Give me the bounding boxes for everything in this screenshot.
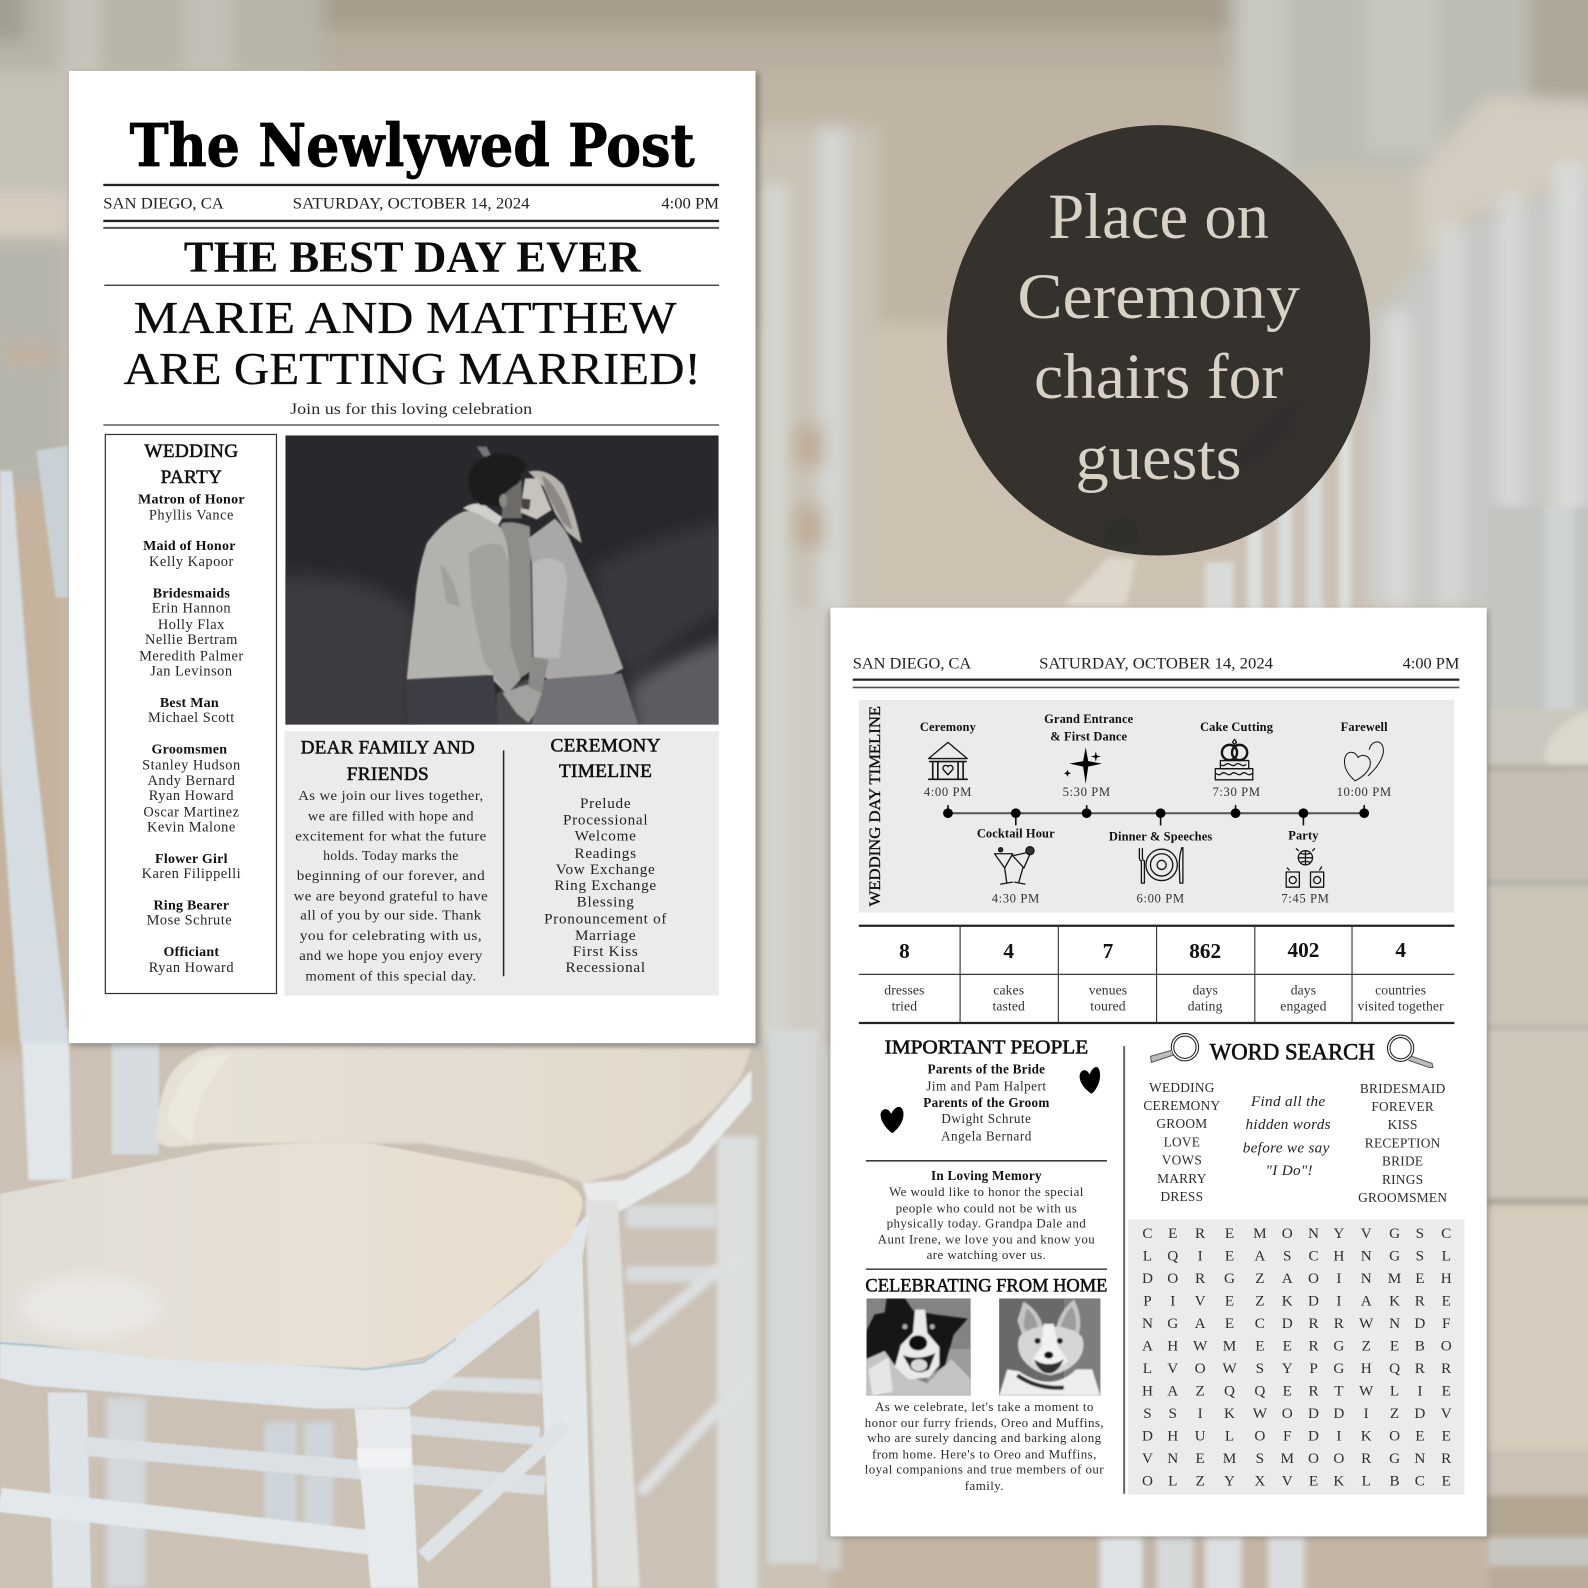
ceremony timeline list: Vow Exchange <box>556 861 656 878</box>
ceremony timeline list: Pronouncement of <box>544 911 667 928</box>
wedding party names: Best Man <box>160 696 219 711</box>
word list left: GROOM <box>1156 1116 1207 1131</box>
icon: martini glasses <box>995 847 1034 884</box>
callout: place on ceremony chairs: Ceremony <box>1017 261 1300 333</box>
stat: venues: 7 <box>1103 939 1114 963</box>
ceremony timeline list: Recessional <box>565 959 646 976</box>
event: grand entrance <box>1044 712 1134 799</box>
photo: corgi <box>999 1298 1100 1396</box>
wedding party names: Michael Scott <box>148 710 235 726</box>
word list right: RINGS <box>1382 1172 1423 1187</box>
word search grid: VNEMSMOORGNR <box>1142 1450 1452 1467</box>
word list right <box>1358 1081 1447 1205</box>
ceremony timeline list: First Kiss <box>573 943 639 960</box>
letter body: we are beyond grateful to have <box>294 889 488 904</box>
letter heading: DEAR FAMILY AND <box>301 737 475 758</box>
ceremony timeline list: Processional <box>563 811 648 828</box>
panel: important people: Parents of the Bride <box>928 1062 1045 1077</box>
wedding party heading <box>144 441 238 488</box>
panel: in loving memory: people who could not be with us <box>896 1200 1077 1215</box>
timeline vertical title: WEDDING DAY TIMELINE <box>867 706 884 906</box>
icon: heart right <box>1080 1067 1100 1094</box>
icon: two hearts <box>1344 742 1383 781</box>
stat: cakes: cakes <box>993 983 1024 998</box>
event: dinner and speeches: Dinner & Speeches <box>1109 830 1212 844</box>
letter body <box>294 789 488 984</box>
page shadow <box>828 610 1489 1538</box>
ceremony timeline heading <box>550 735 661 782</box>
panel: in loving memory: physically today. Grandpa Dale and <box>887 1215 1086 1230</box>
front seat rim <box>0 1211 590 1409</box>
top dateline <box>103 184 719 229</box>
icon: right magnifier <box>1387 1035 1433 1067</box>
word list right: RECEPTION <box>1365 1135 1441 1150</box>
word list left: LOVE <box>1164 1134 1200 1149</box>
front seat cushion <box>0 1142 583 1368</box>
callout: place on ceremony chairs: Place on <box>1048 181 1269 253</box>
wedding party names: Stanley Hudson <box>142 758 241 774</box>
back page dateline <box>853 655 1459 688</box>
panel: important people: Jim and Pam Halpert <box>926 1079 1047 1094</box>
stat: days dating: 862 <box>1189 939 1221 963</box>
letter heading: FRIENDS <box>347 764 429 785</box>
back seat <box>156 1046 751 1183</box>
event: farewell: Farewell <box>1341 720 1388 734</box>
panel: celebrating from home: CELEBRATING FROM HOME <box>865 1275 1107 1296</box>
word search grid: OLZYXVEKLBCE <box>1142 1473 1451 1490</box>
back chair posts <box>21 1030 72 1180</box>
word search instructions: before we say <box>1243 1140 1330 1157</box>
icon: sparkles <box>1064 747 1102 784</box>
far legs <box>768 1030 818 1564</box>
callout: place on ceremony chairs: guests <box>1076 422 1242 494</box>
sub headline: MARIE AND MATTHEW <box>134 292 677 343</box>
wedding party names: Ring Bearer <box>153 898 229 913</box>
stat: countries: visited together <box>1358 999 1444 1014</box>
event: cake cutting <box>1200 720 1274 799</box>
word search grid: HAZQQERTWLIE <box>1142 1383 1451 1400</box>
celebrating paragraph: loyal companions and true members of our <box>865 1462 1104 1477</box>
wedding party names: Maid of Honor <box>143 539 236 554</box>
celebrating paragraph: who are surely dancing and barking along <box>867 1430 1102 1445</box>
panel: word search <box>1128 1034 1464 1495</box>
letter body: moment of this special day. <box>305 969 477 984</box>
wedding party names: Bridesmaids <box>153 587 230 602</box>
sub headline <box>124 292 701 394</box>
event: cake cutting: 7:30 PM <box>1212 785 1261 799</box>
hands <box>503 683 542 723</box>
stat: venues: toured <box>1090 999 1126 1014</box>
wedding party names: Oscar Martinez <box>143 804 239 820</box>
event: dinner and speeches: 6:00 PM <box>1137 891 1185 905</box>
headline: THE BEST DAY EVER <box>184 231 641 281</box>
event: ceremony: Ceremony <box>920 720 977 734</box>
word list left: WEDDING <box>1149 1080 1215 1095</box>
panel: important people: Dwight Schrute <box>941 1111 1031 1126</box>
man jeans <box>406 675 498 725</box>
stat: dresses: dresses <box>884 983 924 998</box>
word list left: MARRY <box>1157 1171 1207 1186</box>
panel: in loving memory: are watching over us. <box>927 1247 1046 1262</box>
wedding party names: Meredith Palmer <box>139 648 244 664</box>
letter body: all of you by our side. Thank <box>300 909 482 924</box>
word search instructions: hidden words <box>1246 1116 1331 1133</box>
wedding party names: Matron of Honor <box>138 492 245 507</box>
event: party: 7:45 PM <box>1281 891 1330 905</box>
ceremony timeline list: Blessing <box>577 893 635 910</box>
wedding party names <box>138 492 245 976</box>
timeline axis <box>943 805 1369 825</box>
celebrating paragraph: As we celebrate, let's take a moment to <box>875 1399 1094 1414</box>
ceremony timeline list: Ring Exchange <box>554 877 657 894</box>
icon: heart left <box>881 1107 903 1133</box>
page: newspaper front page <box>69 71 756 1043</box>
stat: dresses <box>884 939 924 1014</box>
word search grid: CEREMONYVGSC <box>1142 1225 1451 1242</box>
word list right: BRIDE <box>1382 1154 1423 1169</box>
word search grid: LQIEASCHNGSL <box>1143 1248 1451 1265</box>
skin gap <box>501 522 533 678</box>
event: farewell <box>1337 720 1392 799</box>
stat: days engaged: days <box>1291 983 1316 998</box>
panel: celebrating from home <box>865 1275 1107 1493</box>
callout: place on ceremony chairs: chairs for <box>1034 341 1284 413</box>
left foreground post <box>0 471 69 1043</box>
back page dateline: 4:00 PM <box>1403 655 1459 672</box>
ceremony timeline list <box>544 795 667 976</box>
stat: cakes: tasted <box>992 999 1025 1014</box>
invitation line: Join us for this loving celebration <box>290 400 532 418</box>
word search grid: SSIKWODDIZDV <box>1143 1405 1452 1422</box>
panel: important people: Parents of the Groom <box>923 1095 1050 1110</box>
ceremony timeline heading: TIMELINE <box>559 761 652 782</box>
word search heading: WORD SEARCH <box>1210 1039 1375 1065</box>
back page dateline: SAN DIEGO, CA <box>853 655 972 672</box>
stat: dresses: tried <box>892 999 917 1014</box>
panel: in loving memory: We would like to honor the special <box>889 1184 1084 1199</box>
word list left: VOWS <box>1162 1153 1202 1168</box>
event: cocktail hour: Cocktail Hour <box>977 827 1055 841</box>
woman skirt <box>532 673 638 725</box>
wedding party names: Karen Filippelli <box>142 866 241 882</box>
wedding party names: Kelly Kapoor <box>149 554 234 570</box>
wedding party names: Holly Flax <box>158 617 225 633</box>
front chair legs and rails <box>48 1393 91 1588</box>
letter body: excitement for what the future <box>295 830 487 845</box>
celebrating paragraph: family. <box>965 1478 1004 1493</box>
ceremony timeline list: Readings <box>575 845 637 862</box>
word list left: CEREMONY <box>1143 1098 1220 1113</box>
stat: venues: venues <box>1089 983 1127 998</box>
callout: place on ceremony chairs <box>947 125 1370 555</box>
panel: in loving memory: In Loving Memory <box>931 1168 1042 1183</box>
stat: days dating <box>1188 939 1223 1014</box>
event: farewell: 10:00 PM <box>1337 785 1392 799</box>
page shadow <box>71 73 760 1046</box>
stat: days dating: days <box>1192 983 1218 998</box>
letter body: you for celebrating with us, <box>300 929 482 944</box>
panel: in loving memory: Aunt Irene, we love you and know you <box>878 1232 1095 1247</box>
letter body: As we join our lives together, <box>298 789 484 804</box>
stat: dresses: 8 <box>899 939 910 963</box>
icon: gazebo <box>929 742 967 779</box>
wedding party names: Officiant <box>163 945 219 960</box>
event: cocktail hour: 4:30 PM <box>992 891 1040 905</box>
event: cake cutting: Cake Cutting <box>1200 720 1274 734</box>
stat: cakes: 4 <box>1003 939 1014 963</box>
wedding party names: Erin Hannon <box>152 601 231 617</box>
stat: days engaged <box>1280 938 1327 1014</box>
word list right: GROOMSMEN <box>1358 1190 1447 1205</box>
word list right: KISS <box>1388 1117 1418 1132</box>
stat: days engaged: engaged <box>1280 999 1327 1014</box>
wedding party heading: WEDDING <box>144 441 238 462</box>
word search grid: LVOWSYPGHQRR <box>1143 1360 1452 1377</box>
event: ceremony <box>920 720 977 799</box>
stat: days dating: dating <box>1188 999 1223 1014</box>
event: party <box>1281 829 1330 905</box>
event: grand entrance: 5:30 PM <box>1063 785 1111 799</box>
celebrating paragraph <box>865 1399 1104 1493</box>
top dateline: SAN DIEGO, CA <box>103 196 225 213</box>
wedding party heading: PARTY <box>161 467 222 488</box>
wedding party names: Ryan Howard <box>149 960 234 976</box>
panel: important people: Angela Bernard <box>941 1128 1032 1143</box>
wedding party names: Mose Schrute <box>147 913 232 929</box>
stat: countries: 4 <box>1395 938 1406 962</box>
stat: countries: countries <box>1375 983 1426 998</box>
word list left: DRESS <box>1160 1189 1203 1204</box>
ceremony timeline list: Welcome <box>575 828 637 845</box>
word list right: FOREVER <box>1371 1099 1434 1114</box>
celebrating paragraph: honor our furry friends, Oreo and Muffins, <box>865 1415 1104 1430</box>
top dateline: 4:00 PM <box>661 196 719 213</box>
ceremony timeline heading: CEREMONY <box>550 735 661 756</box>
photo: border collie <box>866 1298 971 1396</box>
word search grid: DORGZAOINMEH <box>1142 1270 1452 1287</box>
word search grid: NGAECDRRWNDF <box>1142 1315 1450 1332</box>
page: newspaper back page <box>830 608 1487 1536</box>
stat: countries <box>1358 938 1444 1014</box>
panel: important people: IMPORTANT PEOPLE <box>885 1036 1088 1058</box>
word search grid <box>1128 1219 1464 1495</box>
stat: venues <box>1089 939 1127 1014</box>
event: ceremony: 4:00 PM <box>924 785 972 799</box>
masthead title: The Newlywed Post <box>130 111 695 180</box>
event: dinner and speeches <box>1109 830 1212 905</box>
letter body: and we hope you enjoy every <box>299 949 483 964</box>
wedding party names: Kevin Malone <box>147 819 236 835</box>
letter body: we are filled with hope and <box>308 809 474 824</box>
word list right: BRIDESMAID <box>1360 1081 1446 1096</box>
event: cocktail hour <box>977 827 1055 905</box>
panel: wedding party <box>105 434 276 994</box>
icon: cake with rings <box>1215 739 1253 780</box>
word search instructions: Find all the <box>1250 1093 1325 1110</box>
wedding party names: Andy Bernard <box>147 773 236 789</box>
celebrating paragraph: from home. Here's to Oreo and Muffins, <box>872 1446 1097 1461</box>
ceremony timeline list: Marriage <box>575 927 636 944</box>
word search instructions: "I Do"! <box>1266 1162 1313 1179</box>
icon: left magnifier <box>1150 1034 1199 1062</box>
panel: important people <box>881 1036 1100 1143</box>
word search instructions <box>1243 1093 1331 1179</box>
letter heading <box>301 737 475 785</box>
wedding party names: Groomsmen <box>152 742 227 757</box>
panel: in loving memory <box>878 1168 1095 1262</box>
word search grid: DHULOFDIKOEE <box>1142 1428 1451 1445</box>
word search grid: AHWMEERGZEBO <box>1142 1338 1452 1355</box>
event: grand entrance: Grand Entrance <box>1044 712 1134 726</box>
event: party: Party <box>1288 829 1319 843</box>
stat: cakes <box>992 939 1025 1014</box>
back seat rim <box>582 1069 751 1211</box>
back chair leg <box>585 1200 640 1588</box>
word list left <box>1143 1080 1220 1204</box>
panel: letter and ceremony timeline <box>285 731 719 996</box>
soft chairs near callout <box>1205 562 1234 613</box>
stat: days engaged: 402 <box>1287 938 1319 962</box>
woman hair and face <box>528 471 582 543</box>
icon: disco ball and speakers <box>1286 849 1324 887</box>
event: grand entrance: & First Dance <box>1050 729 1128 743</box>
back page dateline: SATURDAY, OCTOBER 14, 2024 <box>1039 655 1273 672</box>
man sweater <box>406 510 509 693</box>
wedding party names: Nellie Bertram <box>145 632 238 648</box>
woman sweater <box>528 518 623 679</box>
sub headline: ARE GETTING MARRIED! <box>124 343 701 394</box>
wedding party names: Phyllis Vance <box>149 508 234 524</box>
icon: plate and cutlery <box>1139 848 1183 883</box>
man head <box>502 480 522 518</box>
wedding party names: Flower Girl <box>155 852 228 867</box>
letter body: beginning of our forever, and <box>297 869 485 884</box>
photo: couple kissing <box>285 435 719 725</box>
panel: wedding day timeline <box>859 700 1454 912</box>
ceremony timeline list: Prelude <box>580 795 631 812</box>
stats table <box>859 925 1454 1024</box>
word search grid: PIVEZKDIAKRE <box>1143 1293 1451 1310</box>
top dateline: SATURDAY, OCTOBER 14, 2024 <box>293 196 530 213</box>
wedding party names: Jan Levinson <box>150 664 233 680</box>
letter body: holds. Today marks the <box>323 849 459 864</box>
wedding party names: Ryan Howard <box>149 788 234 804</box>
